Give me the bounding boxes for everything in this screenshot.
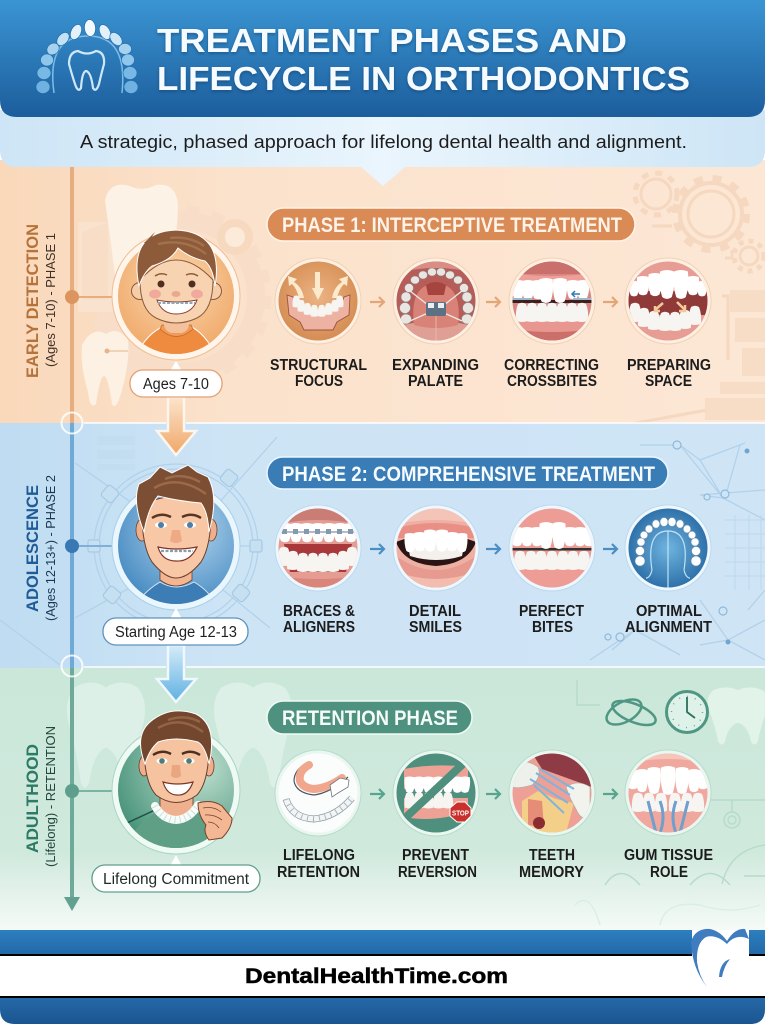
step: optimal alignment: ALIGNMENT — [625, 619, 712, 636]
footer url: DentalHealthTime.com — [245, 965, 508, 988]
step: optimal alignment — [625, 505, 712, 636]
arrow — [603, 789, 617, 799]
step: teeth memory: MEMORY — [519, 864, 585, 881]
step: correcting crossbites — [504, 258, 599, 390]
panel: adolescence background — [0, 423, 765, 670]
step: structural focus: FOCUS — [295, 373, 343, 390]
step: prevent reversion: PREVENT — [402, 847, 469, 864]
banner: phase 1 — [267, 208, 635, 241]
label: adulthood: ADULTHOOD — [24, 744, 42, 853]
banner: retention — [267, 701, 472, 734]
step: optimal alignment: OPTIMAL — [636, 603, 702, 620]
pill: lifelong commitment — [92, 855, 260, 892]
title: LIFECYCLE IN ORTHODONTICS — [157, 61, 690, 98]
panel: early detection background — [0, 160, 765, 425]
step: lifelong retention: LIFELONG — [283, 847, 355, 864]
step: correcting crossbites: CROSSBITES — [507, 373, 597, 390]
subtitle band — [0, 110, 765, 186]
step: prevent reversion — [393, 750, 479, 881]
arrow — [370, 789, 384, 799]
step: teeth memory — [509, 750, 595, 881]
step: expanding palate — [392, 258, 479, 390]
subtitle: A strategic, phased approach for lifelong dental health and alignment. — [80, 131, 687, 152]
step: lifelong retention — [275, 750, 361, 881]
banner: retention: RETENTION PHASE — [282, 707, 458, 730]
label: adolescence: ADOLESCENCE — [24, 485, 42, 612]
portrait: adult with retainer — [112, 711, 240, 854]
logo: tooth — [691, 929, 749, 987]
arrow — [486, 544, 500, 554]
step: lifelong retention: RETENTION — [277, 864, 360, 881]
step: preparing space: PREPARING — [627, 357, 711, 374]
step: gum tissue role — [624, 750, 713, 881]
step: braces and aligners — [275, 505, 361, 636]
step: correcting crossbites: CORRECTING — [504, 357, 599, 374]
arrow — [370, 544, 384, 554]
step: teeth memory: TEETH — [529, 847, 575, 864]
panel: adulthood background — [0, 668, 765, 932]
title: TREATMENT PHASES AND — [157, 23, 627, 60]
label: early detection: (Ages 7-10) - PHASE 1 — [44, 233, 58, 367]
arrow — [603, 544, 617, 554]
pill: ages 7-10 — [130, 361, 222, 397]
step: perfect bites — [509, 505, 595, 636]
label: early detection — [24, 224, 58, 378]
banner: phase 2: PHASE 2: COMPREHENSIVE TREATMENT — [282, 463, 655, 486]
step: detail smiles: DETAIL — [409, 603, 461, 620]
step: expanding palate: EXPANDING — [392, 357, 479, 374]
step: preparing space — [625, 258, 711, 390]
step: detail smiles: SMILES — [409, 619, 462, 636]
title — [157, 23, 690, 98]
portrait: child — [112, 230, 240, 360]
step: perfect bites: BITES — [532, 619, 573, 636]
step: structural focus — [270, 258, 367, 390]
icon: clock — [666, 692, 708, 732]
pill: lifelong commitment: Lifelong Commitment — [103, 871, 250, 888]
label: adolescence — [24, 475, 58, 621]
label: early detection: EARLY DETECTION — [24, 224, 42, 378]
step: gum tissue role: GUM TISSUE — [624, 847, 713, 864]
pill: starting age — [103, 608, 248, 645]
step: detail smiles — [393, 505, 479, 636]
arrow: phase 2 to retention — [157, 645, 196, 702]
step: gum tissue role: ROLE — [650, 864, 688, 881]
icon: dental arch with tooth — [36, 19, 138, 94]
step: structural focus: STRUCTURAL — [270, 357, 367, 374]
timeline — [62, 167, 765, 911]
step: perfect bites: PERFECT — [519, 603, 584, 620]
footer — [0, 930, 765, 1024]
icon: elastic rings — [603, 694, 659, 730]
arrow — [370, 297, 384, 307]
arrow — [486, 297, 500, 307]
step: expanding palate: PALATE — [408, 373, 463, 390]
step: prevent reversion: REVERSION — [398, 864, 477, 881]
banner: phase 2 — [267, 457, 668, 489]
pill: starting age: Starting Age 12-13 — [115, 624, 237, 641]
banner: phase 1: PHASE 1: INTERCEPTIVE TREATMENT — [282, 214, 622, 237]
pill: ages 7-10: Ages 7-10 — [143, 376, 209, 393]
portrait: teenager — [112, 465, 240, 610]
step: preparing space: SPACE — [645, 373, 692, 390]
arrow — [603, 297, 617, 307]
step: braces and aligners: ALIGNERS — [283, 619, 355, 636]
label: adulthood: (Lifelong) - RETENTION — [44, 726, 58, 867]
step: prevent reversion: STOP — [452, 808, 469, 818]
arrow: phase 1 to phase 2 — [157, 397, 196, 455]
arrow — [486, 789, 500, 799]
step: braces and aligners: BRACES & — [283, 603, 355, 620]
label: adulthood — [24, 726, 58, 867]
label: adolescence: (Ages 12-13+) - PHASE 2 — [44, 475, 58, 621]
header band — [0, 0, 765, 186]
